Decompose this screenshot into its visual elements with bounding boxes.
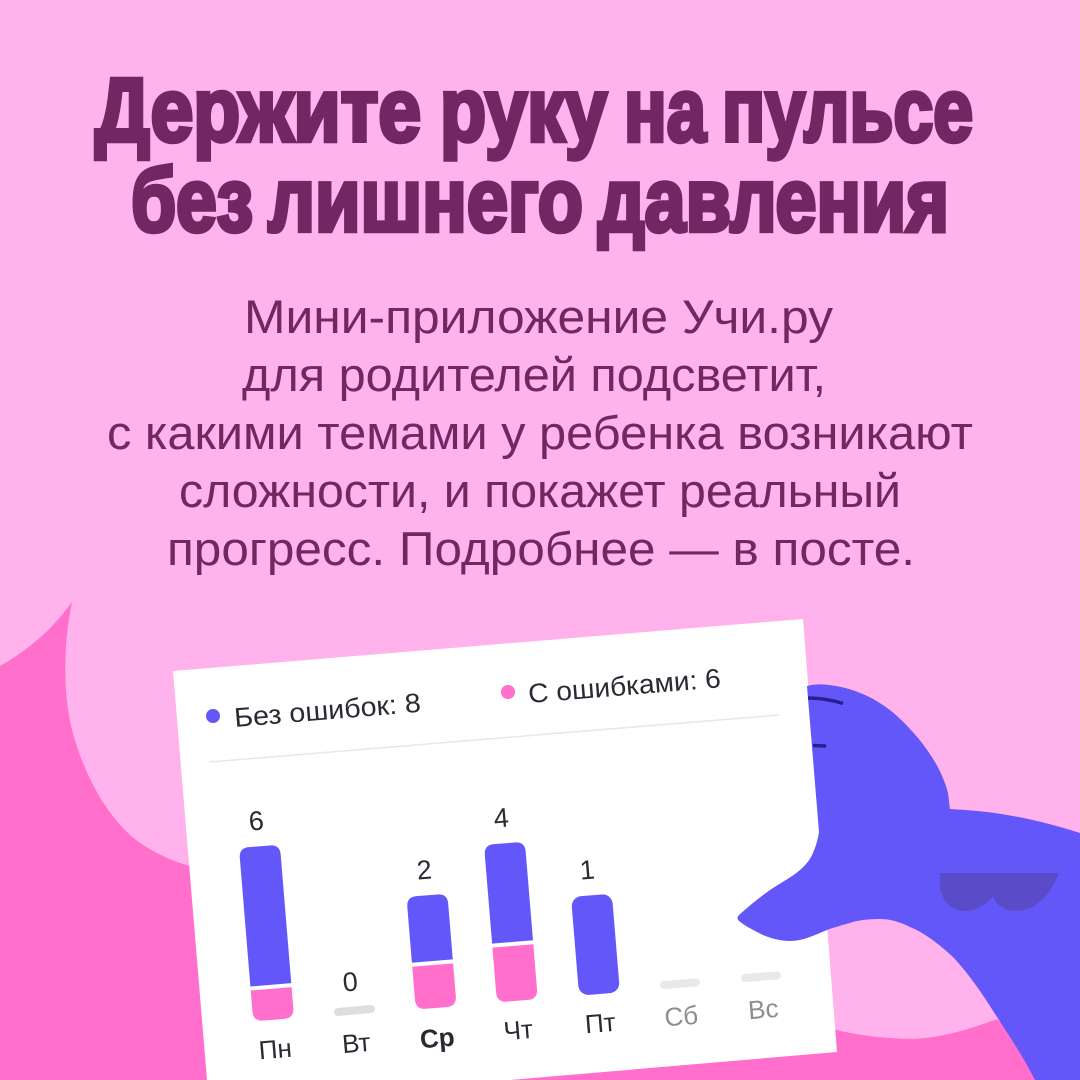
weekday labels [258, 993, 780, 1065]
title: лишнего [268, 151, 583, 251]
bar values [248, 802, 596, 998]
card background [173, 619, 837, 1080]
description text: прогресс. Подробнее — в посте. [167, 522, 915, 575]
bars: Wednesday [406, 894, 457, 1010]
description text: сложности, и покажет реальный [179, 464, 901, 517]
description text: Мини-приложение Учи.ру [244, 290, 834, 343]
title: на [624, 61, 707, 161]
description text: для родителей подсветит, [242, 348, 826, 401]
title: давления [598, 151, 949, 251]
character marks [808, 698, 843, 746]
title: руку [440, 61, 607, 161]
title: Держите [95, 61, 421, 161]
weekday labels: Вс [747, 993, 780, 1025]
legend [206, 663, 722, 733]
background: dark pink wave [0, 602, 1060, 1080]
character shadow mark [940, 873, 1059, 911]
description text [107, 290, 973, 575]
bars: Friday [571, 894, 620, 996]
weekday labels: Пт [584, 1007, 617, 1039]
bar values: 1 [579, 854, 596, 886]
title: пульсе [722, 61, 973, 161]
weekday labels: Пн [258, 1033, 293, 1065]
legend: Без ошибок: 8 [233, 688, 422, 733]
title [95, 61, 973, 251]
bar values: 0 [342, 966, 359, 998]
bar values: 2 [416, 854, 433, 886]
bars: Monday [239, 845, 294, 1021]
title: без [131, 151, 253, 251]
weekday labels: Сб [663, 1000, 699, 1032]
weekday labels: Вт [341, 1027, 372, 1059]
weekday labels: Ср [419, 1022, 456, 1054]
bars: Thursday [484, 842, 538, 1002]
legend: С ошибками: 6 [527, 663, 722, 709]
description text: с какими темами у ребенка возникают [107, 406, 973, 459]
illustration: blue character [738, 684, 1080, 1080]
panel: statistics card [173, 619, 837, 1080]
empty day markers [338, 976, 777, 1012]
bar chart [239, 802, 780, 1065]
weekday labels: Чт [502, 1014, 534, 1046]
bar values: 4 [493, 802, 510, 834]
bar values: 6 [248, 805, 265, 837]
